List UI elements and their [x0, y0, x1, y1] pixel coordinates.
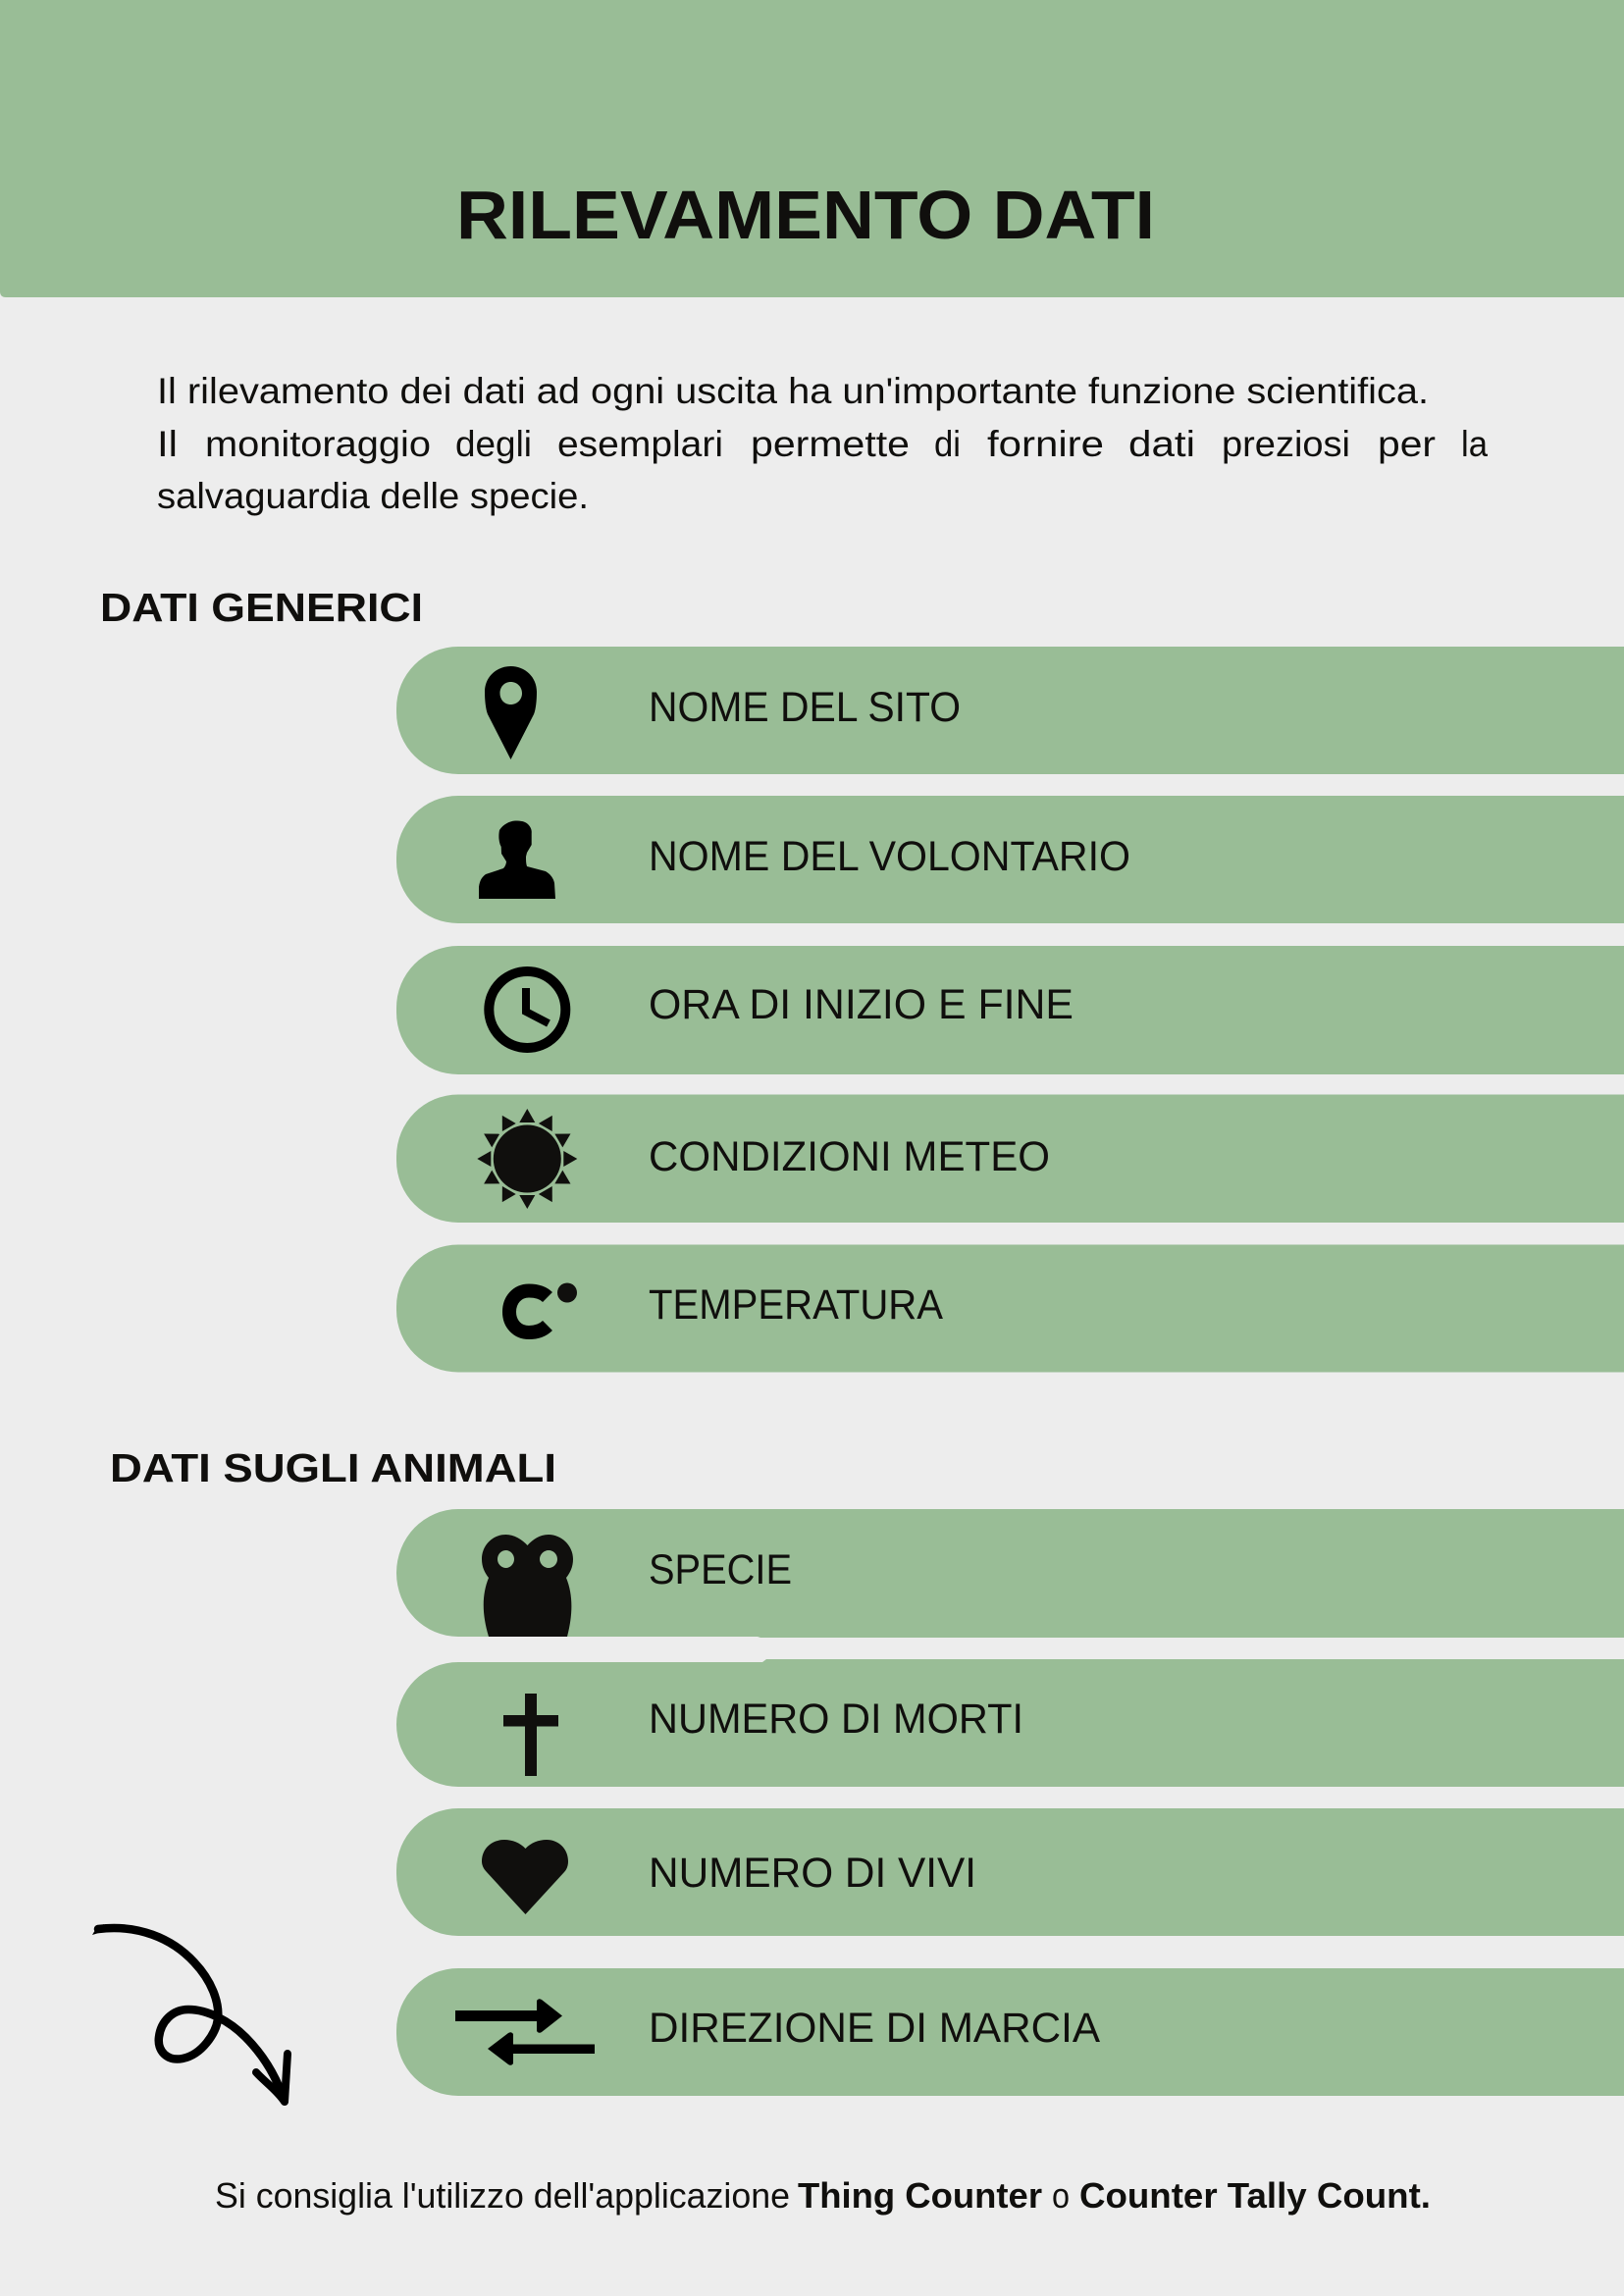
intro paragraph: monitoraggio — [205, 424, 431, 464]
intro paragraph: Il — [157, 424, 178, 464]
header band with title — [0, 0, 1624, 297]
intro paragraph: la — [1461, 424, 1488, 464]
icon: person silhouette — [479, 820, 555, 899]
title: RILEVAMENTO DATI — [456, 177, 1155, 253]
row: nome del volontario — [396, 796, 1624, 923]
intro paragraph: Il rilevamento dei dati ad ogni uscita ha un'importante funzione scientifica. — [157, 371, 1429, 411]
row: specie — [396, 1509, 1624, 1638]
intro paragraph: dati — [1128, 424, 1195, 464]
row: numero di morti — [396, 1659, 1624, 1787]
icon: sun — [477, 1109, 577, 1209]
intro paragraph: esemplari — [557, 424, 723, 464]
icon: heart — [482, 1840, 568, 1914]
row: ora di inizio e fine — [396, 946, 1624, 1074]
row: numero di vivi: NUMERO DI VIVI — [649, 1851, 976, 1897]
heading: dati generici: DATI GENERICI — [100, 585, 423, 630]
intro paragraph: salvaguardia delle specie. — [157, 476, 589, 516]
intro paragraph: permette — [751, 424, 910, 464]
intro paragraph: degli — [455, 424, 532, 464]
icon: location pin — [485, 666, 537, 759]
row: temperatura — [396, 1244, 1624, 1372]
heading: dati sugli animali: DATI SUGLI ANIMALI — [110, 1445, 556, 1490]
row: nome del sito: NOME DEL SITO — [649, 685, 961, 731]
row: direzione di marcia — [396, 1968, 1624, 2096]
row: nome del volontario: NOME DEL VOLONTARIO — [649, 834, 1130, 880]
row: specie: SPECIE — [649, 1547, 792, 1593]
row: numero di morti: NUMERO DI MORTI — [649, 1696, 1023, 1743]
intro paragraph: preziosi — [1222, 424, 1350, 464]
footer note: o — [1052, 2175, 1070, 2216]
row: condizioni meteo — [396, 1095, 1624, 1223]
footer note: Si consiglia l'utilizzo dell'applicazione — [215, 2175, 790, 2216]
icon: opposite arrows — [455, 1999, 595, 2065]
footer note — [215, 2175, 1431, 2216]
icon: degrees celsius — [509, 1283, 577, 1332]
intro paragraph: fornire — [987, 424, 1104, 464]
intro paragraph — [157, 371, 1488, 516]
intro paragraph: di — [934, 424, 961, 464]
row: nome del sito — [396, 647, 1624, 774]
footer note: Thing Counter — [798, 2175, 1042, 2216]
icon: cross — [503, 1694, 558, 1776]
icon: clock — [489, 971, 565, 1048]
row: condizioni meteo: CONDIZIONI METEO — [649, 1134, 1050, 1180]
icon: frog — [482, 1535, 573, 1637]
row: ora di inizio e fine: ORA DI INIZIO E FINE — [649, 982, 1074, 1028]
footer note: Counter Tally Count. — [1079, 2175, 1431, 2216]
arrow: curly hand-drawn arrow — [92, 1924, 288, 2102]
row: direzione di marcia: DIREZIONE DI MARCIA — [649, 2006, 1101, 2052]
intro paragraph: per — [1378, 424, 1436, 464]
row: numero di vivi — [396, 1808, 1624, 1936]
row: temperatura: TEMPERATURA — [649, 1282, 944, 1329]
